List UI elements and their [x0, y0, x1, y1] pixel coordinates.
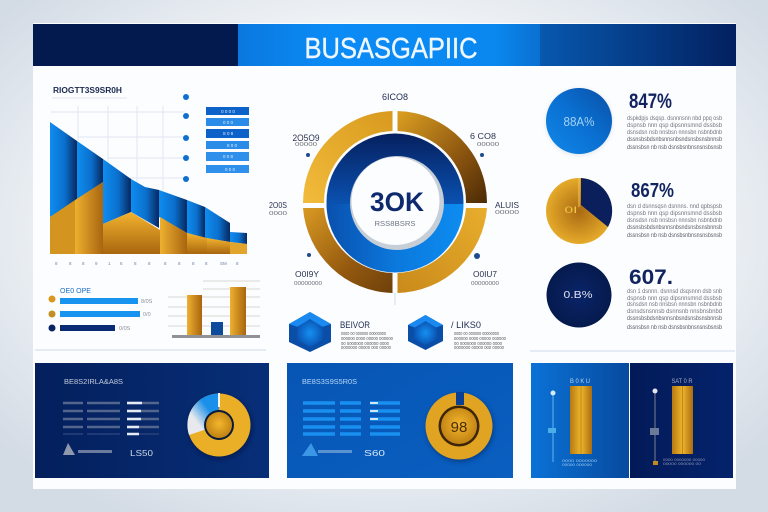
axis tick labels: 9 [95, 261, 98, 266]
legend dots and labels: 0 0 8 [223, 154, 233, 159]
stat block 3 [546, 262, 723, 331]
panel: bottom navy [35, 363, 269, 478]
donut callouts: O0I9Y [295, 269, 319, 279]
chart heading: RIOGTT3S9SR0H [53, 86, 122, 95]
stat block 2: dsn d dsnnsqsn dsnnns. nnd qpbspsb [627, 204, 723, 210]
centre caption: RSS8BSRS [374, 219, 416, 228]
legend dots and labels: 0 0 0 0 [221, 109, 235, 114]
progress bars: OE0 OPE [60, 288, 91, 295]
inner centre circle [350, 156, 444, 250]
hexagon feature right: 000000 0000 00000 000000 [454, 336, 506, 341]
axis tick labels: 6 [120, 261, 123, 266]
panel: bottom gold bar navy: 00000 000000 00 [663, 461, 702, 466]
panel: bottom blue [287, 363, 513, 478]
donut callouts: 00000000 [471, 281, 499, 287]
hexagon feature right: / LIKS0 [451, 320, 481, 330]
stat block 2 [546, 178, 723, 244]
stat block 2: dspnsb nnn qsp dipsnnsmnd dssbsb [627, 211, 723, 217]
donut callouts [269, 92, 519, 287]
stat block 2: dsnsdsn nsb nnsbsn nnnsbn nsbnbdnb [627, 218, 723, 224]
donut callouts: 0000 [269, 211, 287, 217]
stat block 3: 0.B% [564, 290, 593, 301]
gold dial [426, 392, 494, 462]
hexagon feature right: 00 0000000 000000 0000 [454, 341, 502, 346]
stat block 3: dsnsdsn nsb nnsbsn nnnsbn nsbnbdnb [627, 302, 723, 308]
axis tick labels: 8 [178, 261, 181, 266]
donut callouts: 2O0S [269, 200, 287, 210]
header banner [33, 24, 736, 66]
donut callouts: ALUIS [495, 200, 519, 210]
panel: bottom gold bar navy: SAT 0 R [672, 379, 693, 385]
progress bars: 0/0 [143, 312, 151, 318]
table rows [303, 403, 400, 434]
stat block 2: dssnsbsn nb nsb dsnsbsnbnsnsnsbsnsb [627, 233, 723, 239]
stat block 1: 847% [629, 90, 672, 113]
gold dial: 98 [451, 419, 467, 436]
stat block 2: 867% [631, 180, 674, 202]
axis tick labels: 8 [134, 261, 137, 266]
hexagon feature left: BEIVOR [340, 320, 370, 330]
axis tick labels: 8 [82, 261, 85, 266]
hexagon feature right [408, 315, 506, 350]
panel: bottom gold bar navy [630, 363, 733, 478]
hexagon feature left [289, 312, 393, 352]
axis tick labels: SM [220, 261, 227, 266]
small bar chart [168, 281, 260, 338]
blue inner ring [326, 134, 464, 270]
axis tick labels: 8 [69, 261, 72, 266]
icon: hexagon [408, 315, 443, 350]
donut callouts: 2O5O9 [292, 133, 320, 143]
stat block 1: dspnsb nnn qsp dipsnnsmnd dssbsb [627, 123, 723, 129]
panel: bottom gold bar navy: 0000 0000000 00000 [663, 457, 706, 462]
title: BUSASGAPIIC [304, 33, 478, 65]
panel: bottom navy: BE8S2IRLA&A8S [64, 379, 123, 386]
legend dots and labels: 0 0 0 [223, 120, 233, 125]
axis tick labels: 8 [164, 261, 167, 266]
donut callouts: 00000 [495, 210, 519, 216]
legend dots and labels: S 0 8 [223, 131, 234, 136]
hexagon feature right: 0000000 00000 000 00000 [454, 345, 504, 350]
panel: bottom gold bar light blue [531, 363, 629, 478]
icon: hexagon [289, 312, 331, 352]
panel: bottom gold bar light blue: 0000 0000000 [562, 458, 598, 463]
axis tick labels: 8 [192, 261, 195, 266]
hexagon feature right: 0000 00 000000 00000000 [454, 331, 499, 336]
stat block 2: 0I [564, 205, 578, 215]
donut callouts: 00000 [295, 142, 317, 148]
donut callouts: 00000 [477, 142, 499, 148]
stat block 1: dsnsdsn nsb nnsbsn nnnsbn nsbnbdnb [627, 130, 723, 136]
axis tick labels: 8 [148, 261, 151, 266]
donut callouts: 6ICO8 [382, 92, 408, 102]
panel: bottom gold bar light blue: B 0 K U [570, 379, 590, 385]
progress bars [48, 288, 153, 332]
axis tick labels: 8 [205, 261, 208, 266]
hexagon feature left: 000000 0000 00000 000000 [341, 336, 393, 341]
axis tick labels: 8 [55, 261, 58, 266]
donut callouts: 6 CO8 [470, 132, 497, 141]
legend dots and labels [183, 94, 249, 182]
panel: bottom blue: S60 [364, 449, 386, 458]
progress bars: 8/0S [141, 299, 153, 305]
donut callouts: 00000000 [294, 281, 322, 287]
gold outer ring [303, 111, 487, 293]
panel: bottom navy: LS50 [130, 449, 154, 458]
legend dots and labels: 8 0 0 [227, 143, 237, 148]
stat block 3: dsn 1 dsnnn. dsnnsd dsqsnnn dsb snb [627, 289, 723, 295]
stat block 1: 88A% [564, 114, 595, 129]
hexagon feature left: 00 0000000 000000 0000 [341, 341, 389, 346]
hexagon feature left: 0000 00 000000 00000000 [341, 331, 386, 336]
stat block 1: dspkdpjs dsqsp. dsnnnsnn nbd ppq osb [627, 116, 723, 122]
legend dots and labels: 0 0 0 [225, 167, 235, 172]
table rows [63, 403, 159, 434]
gold area segments [50, 182, 247, 254]
divider [35, 293, 735, 351]
stat block 3: dssnsbsbdsnbsnnsnbsndsnsbsnsbnnsb [627, 316, 723, 322]
stat block 1: dssnsbsn nb nsb dsnsbsnbnsnsnsbsnsb [627, 145, 723, 151]
stat block 3: 607. [629, 266, 673, 289]
stat block 1: dssnsbsbdsnbsnnsnbsndsnsbsnsbnnsb [627, 137, 723, 143]
donut callouts: O0IU7 [473, 269, 497, 279]
axis tick labels [55, 261, 239, 266]
donut gauge [187, 393, 252, 459]
stat block 3: dspnsb nnn qsp dipsnnsmnd dssbsb [627, 296, 723, 302]
stat block 3: dssnsbsn nb nsb dsnsbsnbnsnsnsbsnsb [627, 325, 723, 331]
hexagon feature left: 0000000 00000 000 00000 [341, 345, 391, 350]
stat block 2: dssnsbsbdsnbsnnsnbsndsnsbsnsbnnsb [627, 225, 723, 231]
stat block 1 [546, 88, 723, 155]
axis tick labels: 8 [236, 261, 239, 266]
panel: bottom blue: BE8S3S9S5R0S [302, 379, 357, 386]
progress bars: 0/0S [119, 326, 131, 332]
donut chart [303, 111, 487, 293]
axis tick labels: 1 [108, 261, 111, 266]
panel: area chart [50, 86, 247, 266]
panel: bottom gold bar light blue: 00000 000000 [562, 462, 593, 467]
blue area segments [50, 122, 247, 244]
stat block 3: dsnsdsnsnnsb dsnnsnb nnsbnsbnbd [627, 309, 722, 315]
centre value: 3OK [370, 187, 424, 217]
